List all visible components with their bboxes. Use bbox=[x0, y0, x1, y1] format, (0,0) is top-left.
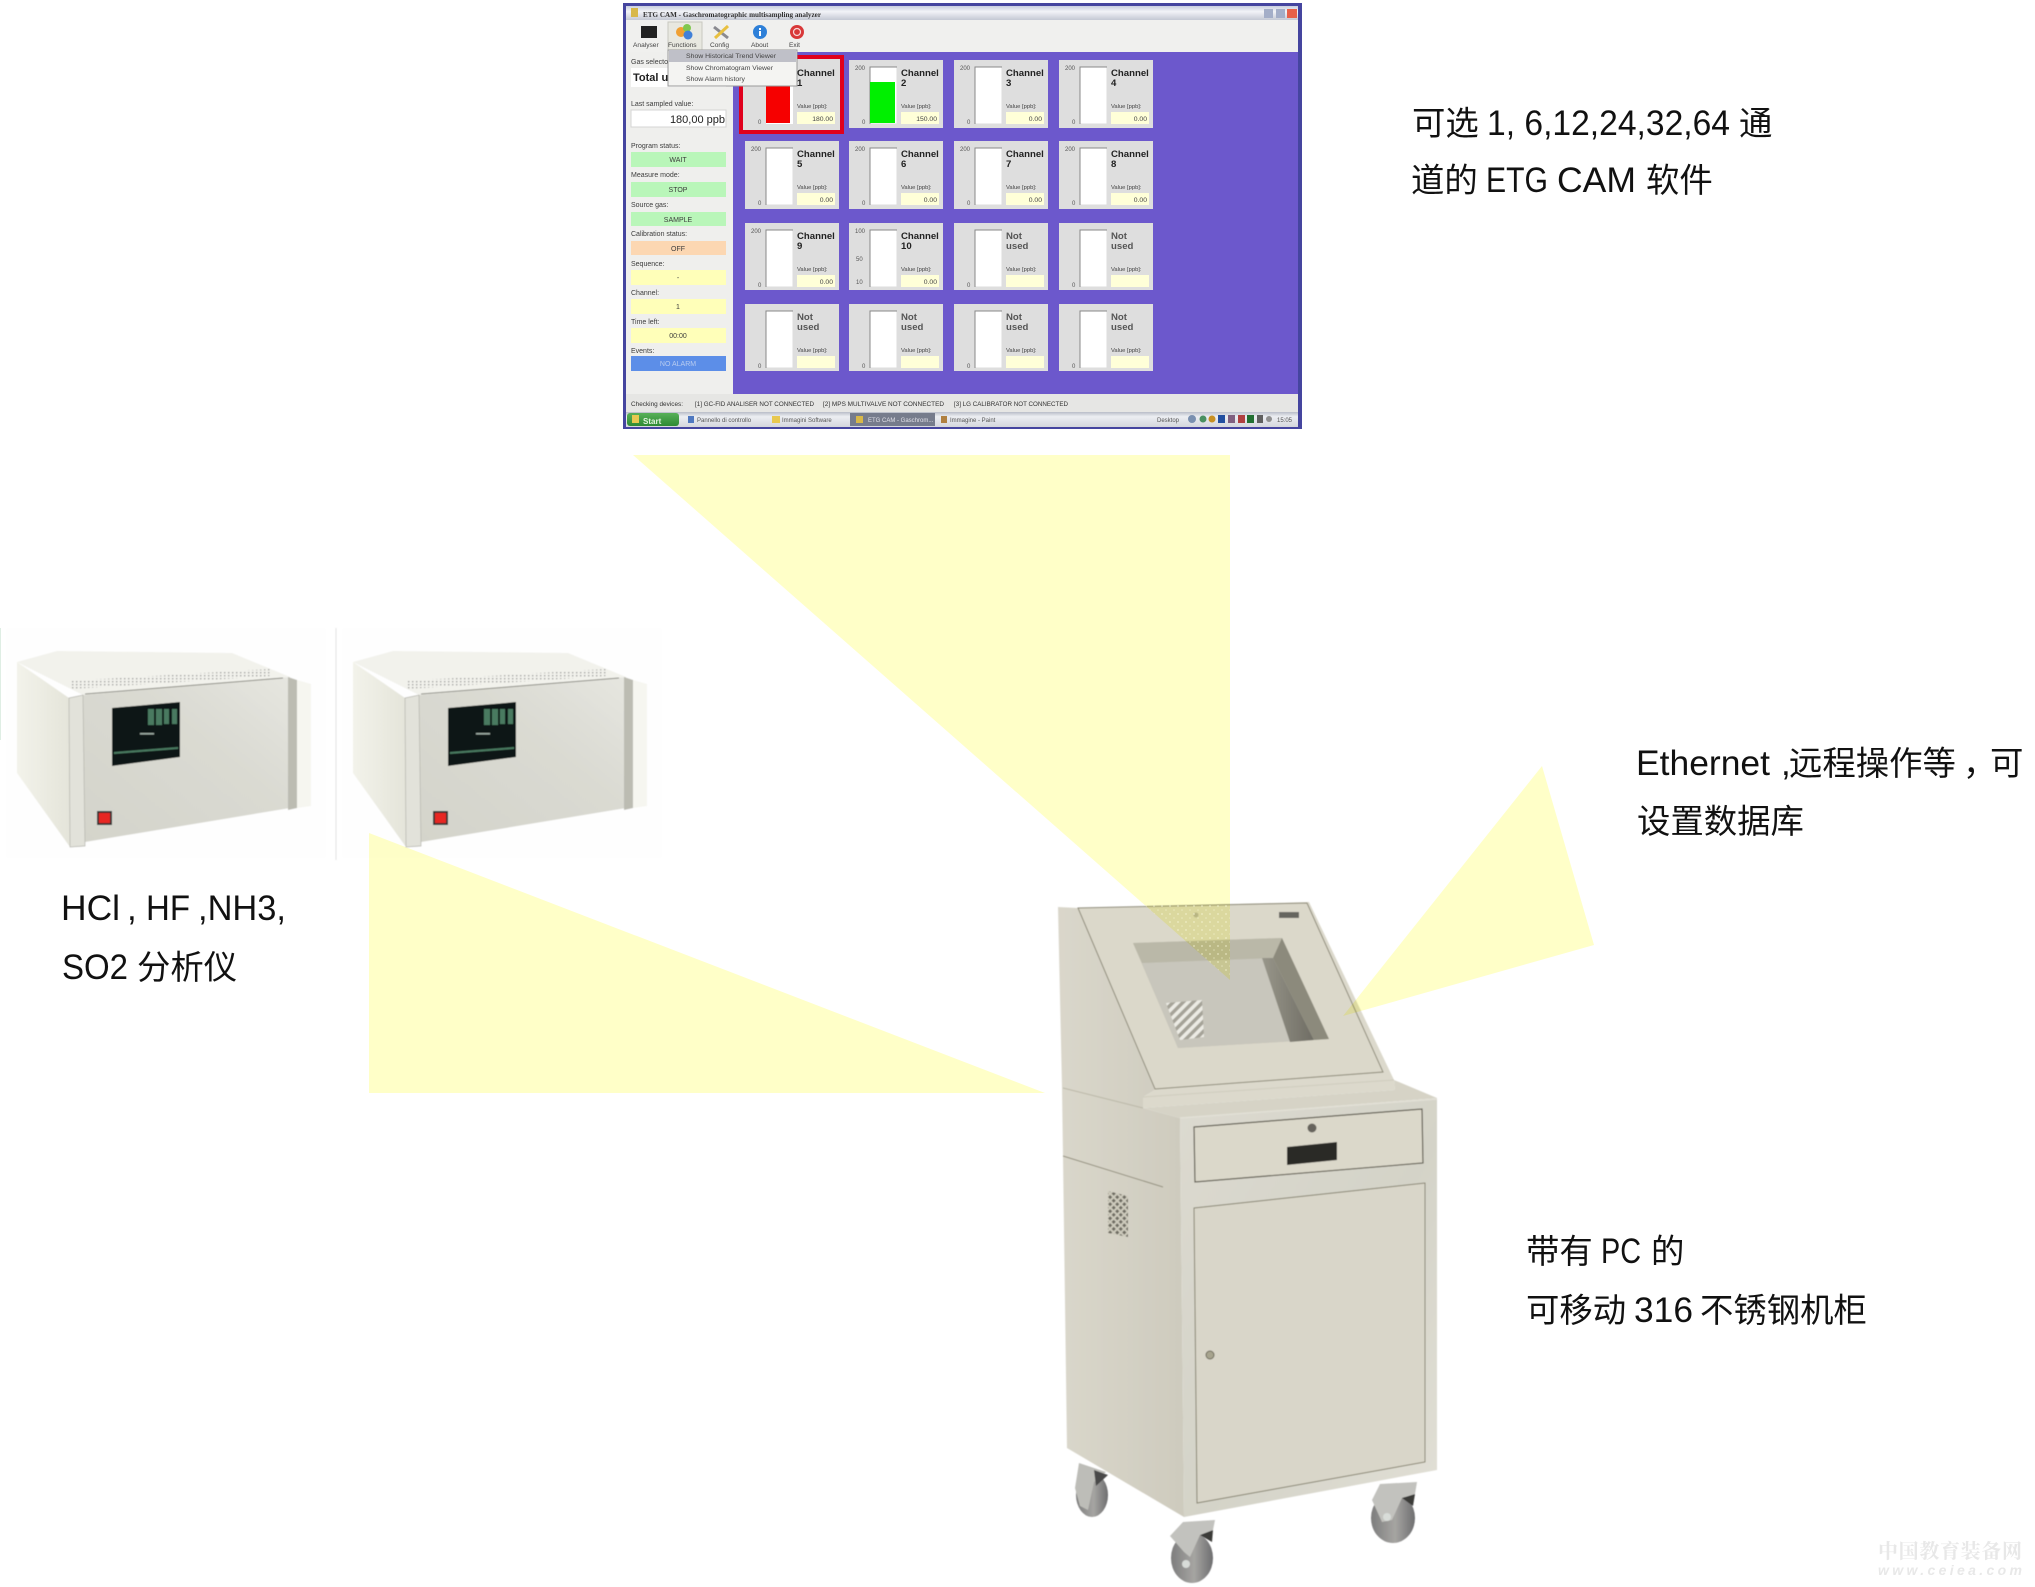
channel 5 card bbox=[745, 141, 839, 209]
channel 3 card: 3 bbox=[1006, 78, 1011, 89]
unused channel card row 4 col 3: Value [ppb]: bbox=[1006, 348, 1037, 354]
unused channel card row 4 col 2: used bbox=[901, 322, 924, 333]
left status panel: SAMPLE bbox=[664, 217, 693, 224]
sloped hood panel bbox=[1078, 902, 1395, 1108]
unused channel card row 4 col 4: Not bbox=[1111, 312, 1128, 323]
tray icons bbox=[1188, 415, 1272, 423]
channel 7 card: 0.00 bbox=[1029, 197, 1042, 204]
channel 8 card: Value [ppb]: bbox=[1111, 185, 1142, 191]
label: analyzers bbox=[61, 889, 286, 987]
channel 2 card: 200 bbox=[855, 66, 866, 72]
toolbar: About bbox=[751, 42, 768, 49]
channel 1 card: Value [ppb]: bbox=[797, 104, 828, 110]
label: ethernet: 可 bbox=[1990, 746, 2023, 783]
label: analyzers: , bbox=[127, 889, 137, 928]
channel 6 card: 6 bbox=[901, 159, 906, 170]
channel 8 card: Channel bbox=[1111, 149, 1149, 160]
channel 10 card: Value [ppb]: bbox=[901, 267, 932, 273]
title bar bbox=[626, 6, 1298, 20]
unused channel card row 3 col 3: Not bbox=[1006, 231, 1023, 242]
left status panel: - bbox=[677, 275, 680, 282]
left status panel: Gas selector bbox=[631, 59, 671, 66]
channel 7 card: 7 bbox=[1006, 159, 1011, 170]
channel 9 card: Value [ppb]: bbox=[797, 267, 828, 273]
drawer bbox=[1194, 1109, 1423, 1182]
channel 8 card: 200 bbox=[1065, 147, 1076, 153]
channel 3 card: Channel bbox=[1006, 68, 1044, 79]
unused channel card row 4 col 2 bbox=[849, 304, 943, 371]
unused channel card row 3 col 3 bbox=[954, 223, 1048, 290]
channel 9 card: 0.00 bbox=[820, 279, 833, 286]
unused channel card row 4 col 3: Not bbox=[1006, 312, 1023, 323]
channel 3 card: 200 bbox=[960, 66, 971, 72]
unused channel card row 4 col 2: Value [ppb]: bbox=[901, 348, 932, 354]
unused channel card row 4 col 1: Value [ppb]: bbox=[797, 348, 828, 354]
unused channel card row 4 col 3 bbox=[954, 304, 1048, 371]
unused channel card row 4 col 3: 0 bbox=[967, 364, 971, 370]
base front bbox=[1180, 1098, 1437, 1517]
channel 3 card: Value [ppb]: bbox=[1006, 104, 1037, 110]
label: analyzers: ,NH3, bbox=[198, 889, 286, 928]
functions dropdown menu: Show Alarm history bbox=[686, 76, 746, 83]
channel 8 card: 0.00 bbox=[1134, 197, 1147, 204]
left status panel: NO ALARM bbox=[660, 361, 696, 368]
channel 6 card: 200 bbox=[855, 147, 866, 153]
channel 6 card: 0.00 bbox=[924, 197, 937, 204]
left status panel bbox=[626, 52, 733, 394]
label: software channels: 1, 6,12,24,32,64 bbox=[1487, 104, 1730, 143]
windows taskbar: Start bbox=[643, 417, 662, 426]
analyzer rails bbox=[69, 695, 85, 847]
channel 8 card bbox=[1059, 141, 1153, 209]
channel 10 card: 50 bbox=[856, 257, 863, 263]
channel 1 card: Channel bbox=[797, 68, 835, 79]
yellow connector: analyzers to cabinet bbox=[369, 833, 1045, 1093]
analyzer power switch bbox=[433, 811, 448, 825]
dotted overlap on cabinet hood bbox=[1141, 902, 1230, 980]
unused channel card row 3 col 3: Value [ppb]: bbox=[1006, 267, 1037, 273]
channel 1 card: 1 bbox=[797, 78, 803, 89]
functions dropdown menu bbox=[668, 50, 797, 86]
label: ethernet: 设置数据库 bbox=[1637, 804, 1804, 841]
channel 5 card: 0.00 bbox=[820, 197, 833, 204]
channel 5 card: Channel bbox=[797, 149, 835, 160]
purple channel area bbox=[733, 52, 1298, 394]
channel 5 card: Value [ppb]: bbox=[797, 185, 828, 191]
badge bbox=[1279, 912, 1299, 918]
left status panel: OFF bbox=[671, 246, 685, 253]
channel 4 card: Value [ppb]: bbox=[1111, 104, 1142, 110]
unused channel card row 4 col 4: used bbox=[1111, 322, 1134, 333]
toolbar: Analyser bbox=[633, 42, 659, 49]
faint edge line at left margin bbox=[0, 628, 2, 740]
wheel back right bbox=[1371, 1482, 1417, 1543]
label: ethernet: Ethernet bbox=[1636, 744, 1770, 783]
window frame bbox=[623, 3, 1302, 429]
label: analyzers: HF bbox=[146, 889, 190, 928]
window opening bbox=[1133, 938, 1329, 1048]
icon: exit bbox=[790, 25, 804, 39]
channel 2 card: Value [ppb]: bbox=[901, 104, 932, 110]
analyzer display bbox=[112, 702, 180, 766]
windows taskbar: Pannello di controllo bbox=[697, 418, 752, 424]
icon: functions bbox=[668, 22, 702, 51]
channel 4 card bbox=[1059, 60, 1153, 128]
status bar bbox=[626, 394, 1298, 412]
channel 9 card: 0 bbox=[758, 283, 762, 289]
left status panel: Time left: bbox=[631, 319, 660, 326]
label: cabinet: 不锈钢机柜 bbox=[1700, 1293, 1867, 1330]
channel 3 card: 0.00 bbox=[1029, 116, 1042, 123]
label: software channels bbox=[1411, 104, 1772, 200]
left status panel: Program status: bbox=[631, 143, 680, 150]
unused channel card row 3 col 4 bbox=[1059, 223, 1153, 290]
channel 10 card: 10 bbox=[901, 241, 912, 252]
label: ethernet bbox=[1636, 744, 2023, 841]
cabinet bbox=[1058, 902, 1437, 1583]
channel 4 card: 4 bbox=[1111, 78, 1117, 89]
unused channel card row 4 col 3: used bbox=[1006, 322, 1029, 333]
analyzer side bbox=[17, 662, 70, 847]
channel 10 card: 0.00 bbox=[924, 279, 937, 286]
title bar: ETG CAM - Gaschromatographic multisampling analyzer bbox=[643, 10, 822, 19]
windows taskbar: Desktop bbox=[1157, 418, 1180, 424]
channel 8 card: 8 bbox=[1111, 159, 1117, 170]
left status panel: Last sampled value: bbox=[631, 101, 693, 108]
icon: about bbox=[753, 25, 767, 39]
left status panel: 180,00 ppb bbox=[670, 114, 725, 126]
label: software channels: 可选 bbox=[1412, 106, 1479, 143]
channel 4 card: 0.00 bbox=[1134, 116, 1147, 123]
unused channel card row 4 col 1: 0 bbox=[758, 364, 762, 370]
windows taskbar: Immagine - Paint bbox=[950, 418, 996, 424]
channel 2 card: 150.00 bbox=[916, 116, 937, 123]
unused channel card row 3 col 3: 0 bbox=[967, 283, 971, 289]
channel 7 card: Channel bbox=[1006, 149, 1044, 160]
label: analyzers: 分析仪 bbox=[137, 950, 237, 987]
icon: analyser bbox=[641, 26, 657, 38]
unused channel card row 4 col 4 bbox=[1059, 304, 1153, 371]
toolbar: Exit bbox=[789, 42, 800, 49]
label: cabinet: 带有 bbox=[1526, 1234, 1593, 1271]
yellow connector: ethernet to cabinet bbox=[1343, 766, 1594, 1016]
channel 4 card: 200 bbox=[1065, 66, 1076, 72]
label: cabinet: PC bbox=[1601, 1232, 1641, 1271]
toolbar bbox=[626, 20, 1298, 52]
functions dropdown menu: Show Historical Trend Viewer bbox=[686, 53, 777, 60]
status bar: [3] LG CALIBRATOR NOT CONNECTED bbox=[954, 401, 1068, 408]
watermark bbox=[1878, 1540, 2022, 1578]
channel 6 card: Value [ppb]: bbox=[901, 185, 932, 191]
channel 10 card bbox=[849, 223, 943, 290]
label: analyzers: HCl bbox=[61, 889, 120, 928]
channel 5 card: 200 bbox=[751, 147, 762, 153]
analyzer front plate bbox=[83, 677, 290, 842]
status bar: [2] MPS MULTIVALVE NOT CONNECTED bbox=[823, 401, 944, 408]
channel 9 card bbox=[745, 223, 839, 290]
unused channel card row 4 col 4: Value [ppb]: bbox=[1111, 348, 1142, 354]
label: software channels: CAM bbox=[1557, 161, 1636, 200]
channel 3 card: 0 bbox=[967, 120, 971, 126]
channel 7 card: Value [ppb]: bbox=[1006, 185, 1037, 191]
label: software channels: 通 bbox=[1739, 106, 1772, 143]
analyzer side bbox=[353, 662, 406, 847]
channel 10 card: 100 bbox=[855, 229, 866, 235]
left status panel: Channel: bbox=[631, 290, 659, 297]
label: cabinet: 316 bbox=[1634, 1291, 1693, 1330]
channel 4 card: 0 bbox=[1072, 120, 1076, 126]
unused channel card row 3 col 3: used bbox=[1006, 241, 1029, 252]
vent bbox=[1108, 1191, 1128, 1237]
label: software channels: 软件 bbox=[1646, 163, 1713, 200]
screw hole bbox=[1194, 912, 1198, 918]
unused channel card row 4 col 1: used bbox=[797, 322, 820, 333]
channel 10 card: 10 bbox=[856, 280, 863, 286]
label: cabinet: 的 bbox=[1651, 1234, 1684, 1271]
windows taskbar: ETG CAM - Gaschrom... bbox=[868, 418, 934, 424]
channel 7 card: 0 bbox=[967, 201, 971, 207]
unused channel card row 4 col 1: Not bbox=[797, 312, 814, 323]
watermark: 中国教育装备网 bbox=[1878, 1540, 2022, 1563]
status bar: Checking devices: bbox=[631, 401, 683, 408]
left status panel: Total u bbox=[633, 72, 668, 84]
channel 3 card bbox=[954, 60, 1048, 128]
functions dropdown menu: Show Chromatogram Viewer bbox=[686, 65, 774, 72]
unused channel card row 3 col 4: Value [ppb]: bbox=[1111, 267, 1142, 273]
label: software channels: 道的 bbox=[1411, 163, 1478, 200]
analyzer front plate bbox=[419, 677, 626, 842]
channel 2 card: 0 bbox=[862, 120, 866, 126]
watermark: www.ceiea.com bbox=[1878, 1562, 2022, 1578]
label: cabinet bbox=[1526, 1232, 1867, 1330]
left status panel: WAIT bbox=[669, 157, 687, 164]
channel 1 card: 0 bbox=[758, 120, 762, 126]
left status panel: Source gas: bbox=[631, 202, 668, 209]
status bar: [1] GC-FID ANALISER NOT CONNECTED bbox=[695, 401, 814, 408]
channel 6 card bbox=[849, 141, 943, 209]
toolbar: Config bbox=[710, 42, 729, 49]
channel 5 card: 5 bbox=[797, 159, 803, 170]
channel 9 card: 9 bbox=[797, 241, 802, 252]
channel 6 card: 0 bbox=[862, 201, 866, 207]
label: analyzers: SO2 bbox=[62, 948, 128, 987]
analyzer rails bbox=[405, 695, 421, 847]
channel 10 card: Channel bbox=[901, 231, 939, 242]
label: ethernet: ， bbox=[1963, 746, 1996, 783]
cabinet door bbox=[1194, 1183, 1425, 1503]
analyzer 2 bbox=[336, 628, 662, 860]
unused channel card row 4 col 1 bbox=[745, 304, 839, 371]
unused channel card row 4 col 2: 0 bbox=[862, 364, 866, 370]
wheel front bbox=[1170, 1520, 1215, 1583]
left status panel: Sequence: bbox=[631, 261, 665, 268]
cabinet side bbox=[1058, 907, 1184, 1517]
left status panel: Measure mode: bbox=[631, 172, 680, 179]
yellow connector: screen to cabinet bbox=[633, 455, 1230, 980]
label: ethernet: 远程操作等 bbox=[1789, 746, 1956, 783]
label: software channels: ETG bbox=[1486, 161, 1548, 200]
channel 7 card: 200 bbox=[960, 147, 971, 153]
channel 5 card: 0 bbox=[758, 201, 762, 207]
wheel back left bbox=[1075, 1463, 1108, 1517]
analyzer top bbox=[353, 651, 626, 695]
channel 7 card bbox=[954, 141, 1048, 209]
channel 6 card: Channel bbox=[901, 149, 939, 160]
analyzer 1 bbox=[6, 628, 326, 858]
label: cabinet: 可移动 bbox=[1526, 1293, 1626, 1330]
unused channel card row 4 col 2: Not bbox=[901, 312, 918, 323]
windows taskbar: 15:05 bbox=[1277, 418, 1293, 424]
left status panel: 00:00 bbox=[669, 333, 687, 340]
left status panel: Events: bbox=[631, 348, 654, 355]
unused channel card row 3 col 4: 0 bbox=[1072, 283, 1076, 289]
left status panel: Calibration status: bbox=[631, 231, 687, 238]
channel 1 card bbox=[741, 57, 842, 132]
channel 2 card: Channel bbox=[901, 68, 939, 79]
channel 9 card: 200 bbox=[751, 229, 762, 235]
unused channel card row 3 col 4: Not bbox=[1111, 231, 1128, 242]
counter top surface bbox=[1143, 1080, 1437, 1118]
analyzer top bbox=[17, 651, 290, 695]
channel 2 card: 2 bbox=[901, 78, 906, 89]
left status panel: STOP bbox=[669, 187, 688, 194]
channel 1 card: 180.00 bbox=[812, 116, 833, 123]
panel: ETG CAM software screenshot bbox=[623, 3, 1302, 429]
unused channel card row 3 col 4: used bbox=[1111, 241, 1134, 252]
left status panel: 1 bbox=[676, 304, 680, 311]
windows taskbar: Immagini Software bbox=[782, 418, 832, 424]
channel 9 card: Channel bbox=[797, 231, 835, 242]
channel 4 card: Channel bbox=[1111, 68, 1149, 79]
channel 8 card: 0 bbox=[1072, 201, 1076, 207]
label: ethernet: , bbox=[1781, 744, 1791, 783]
analyzer power switch bbox=[97, 811, 112, 825]
unused channel card row 4 col 4: 0 bbox=[1072, 364, 1076, 370]
icon: config bbox=[714, 26, 728, 38]
toolbar: Functions bbox=[668, 42, 697, 49]
windows taskbar bbox=[626, 412, 1298, 427]
channel 2 card bbox=[849, 60, 943, 128]
analyzer display bbox=[448, 702, 516, 766]
